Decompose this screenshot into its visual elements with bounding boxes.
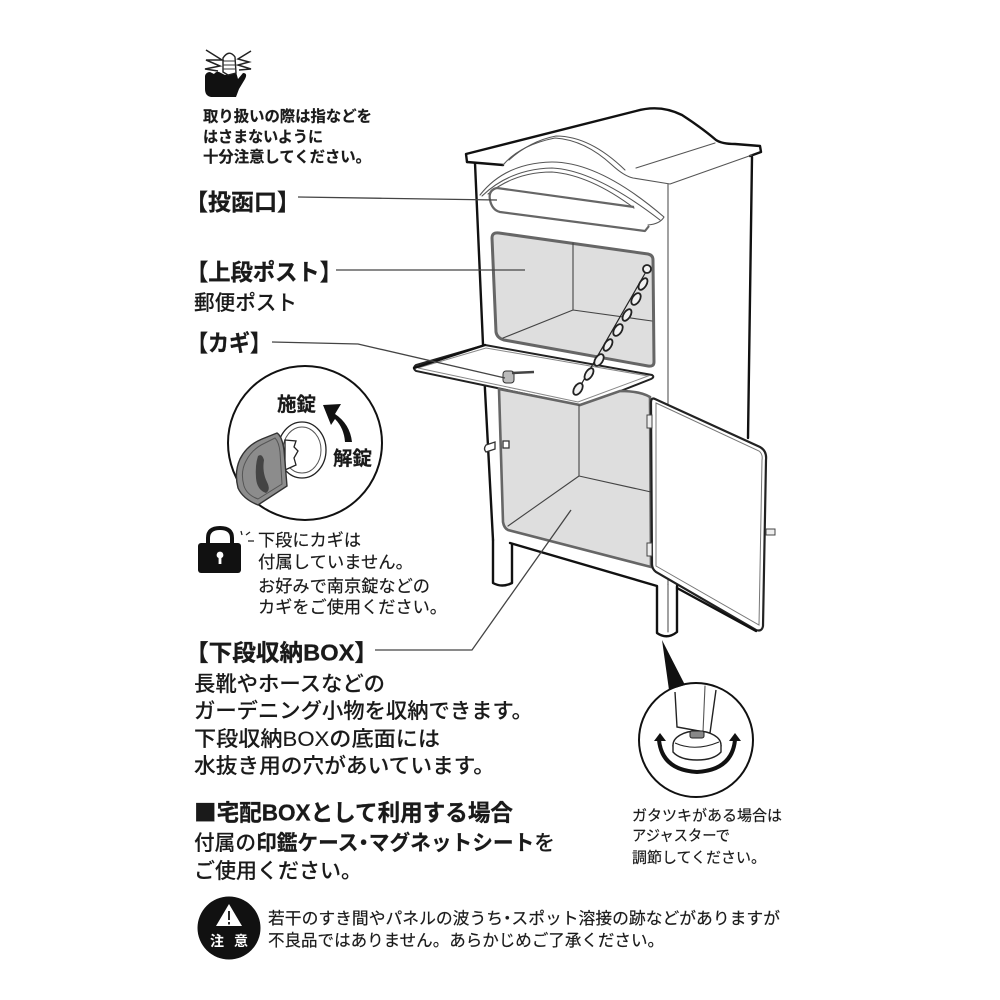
open door — [651, 398, 766, 630]
text: delivery box instructions — [194, 830, 555, 883]
text: caution note: 若干のすき間やパネルの波うち・スポット溶接の跡などがありますが — [268, 909, 781, 928]
text: key not included: 下段にカギは — [258, 530, 361, 550]
text: finger caution: はさまないように — [203, 129, 323, 146]
text: lower box description — [194, 672, 533, 778]
text: unlock: 解錠 — [333, 448, 372, 470]
legs — [493, 540, 512, 586]
flap door with lock — [414, 345, 653, 406]
callout: key lock diagram — [228, 366, 382, 520]
text: delivery box instructions: ご使用ください。 — [194, 859, 362, 883]
text: adjuster note: ガタツキがある場合は — [632, 808, 782, 824]
text: adjuster note — [632, 808, 782, 866]
text: key not included: 付属していません。 — [258, 552, 413, 572]
leader lines — [272, 197, 571, 650]
door hinges and handle — [647, 415, 775, 556]
icon: caution badge: 注意 — [210, 933, 248, 949]
text: lower box description: ガーデニング小物を収納できます。 — [194, 698, 533, 723]
icon: caution badge — [198, 896, 260, 960]
text: key not included: お好みで南京錠などの — [258, 576, 430, 596]
heading: delivery box use: ■宅配BOXとして利用する場合 — [194, 794, 513, 828]
text: lower box description: 水抜き用の穴があいています。 — [194, 754, 495, 778]
cabinet outline — [475, 163, 493, 540]
roof — [466, 108, 761, 184]
text: finger caution — [203, 108, 372, 166]
illustration: mailbox — [414, 108, 775, 636]
text: finger caution: 取り扱いの際は指などを — [203, 108, 372, 126]
arrow: rotate to lock — [323, 404, 352, 442]
text: key not included — [258, 530, 447, 617]
arch and mail slot — [480, 162, 664, 225]
heading: key: 【カギ】 — [187, 330, 271, 356]
text: key not included: カギをご使用ください。 — [258, 597, 447, 617]
text: caution note — [268, 909, 781, 950]
icon: padlock — [198, 528, 254, 573]
text: adjuster note: アジャスターで — [632, 828, 730, 844]
heading: lower storage box: 【下段収納BOX】 — [185, 640, 378, 666]
text: lower box description: 下段収納BOXの底面には — [194, 727, 440, 751]
callout: adjuster diagram — [639, 640, 753, 797]
text: lower box description: 長靴やホースなどの — [194, 672, 385, 696]
text: finger caution: 十分注意してください。 — [203, 148, 371, 166]
heading: mail slot: 【投函口】 — [185, 189, 300, 215]
text: adjuster note: 調節してください。 — [632, 850, 766, 866]
arrows: adjust rotation — [659, 740, 735, 772]
text: lock: 施錠 — [277, 394, 316, 416]
heading: upper post: 【上段ポスト】 — [186, 259, 342, 285]
latch tabs — [484, 441, 509, 452]
text: caution note: 不良品ではありません。あらかじめご了承ください。 — [268, 931, 664, 950]
upper mail compartment — [492, 233, 654, 366]
text: mail post: 郵便ポスト — [194, 291, 297, 315]
flap key latch — [503, 371, 534, 383]
icon: pinched finger warning — [205, 50, 251, 97]
text: delivery box instructions: 付属の印鑑ケース・マグネットシートを — [194, 830, 555, 855]
lower storage box — [499, 389, 651, 567]
chain — [571, 265, 651, 397]
